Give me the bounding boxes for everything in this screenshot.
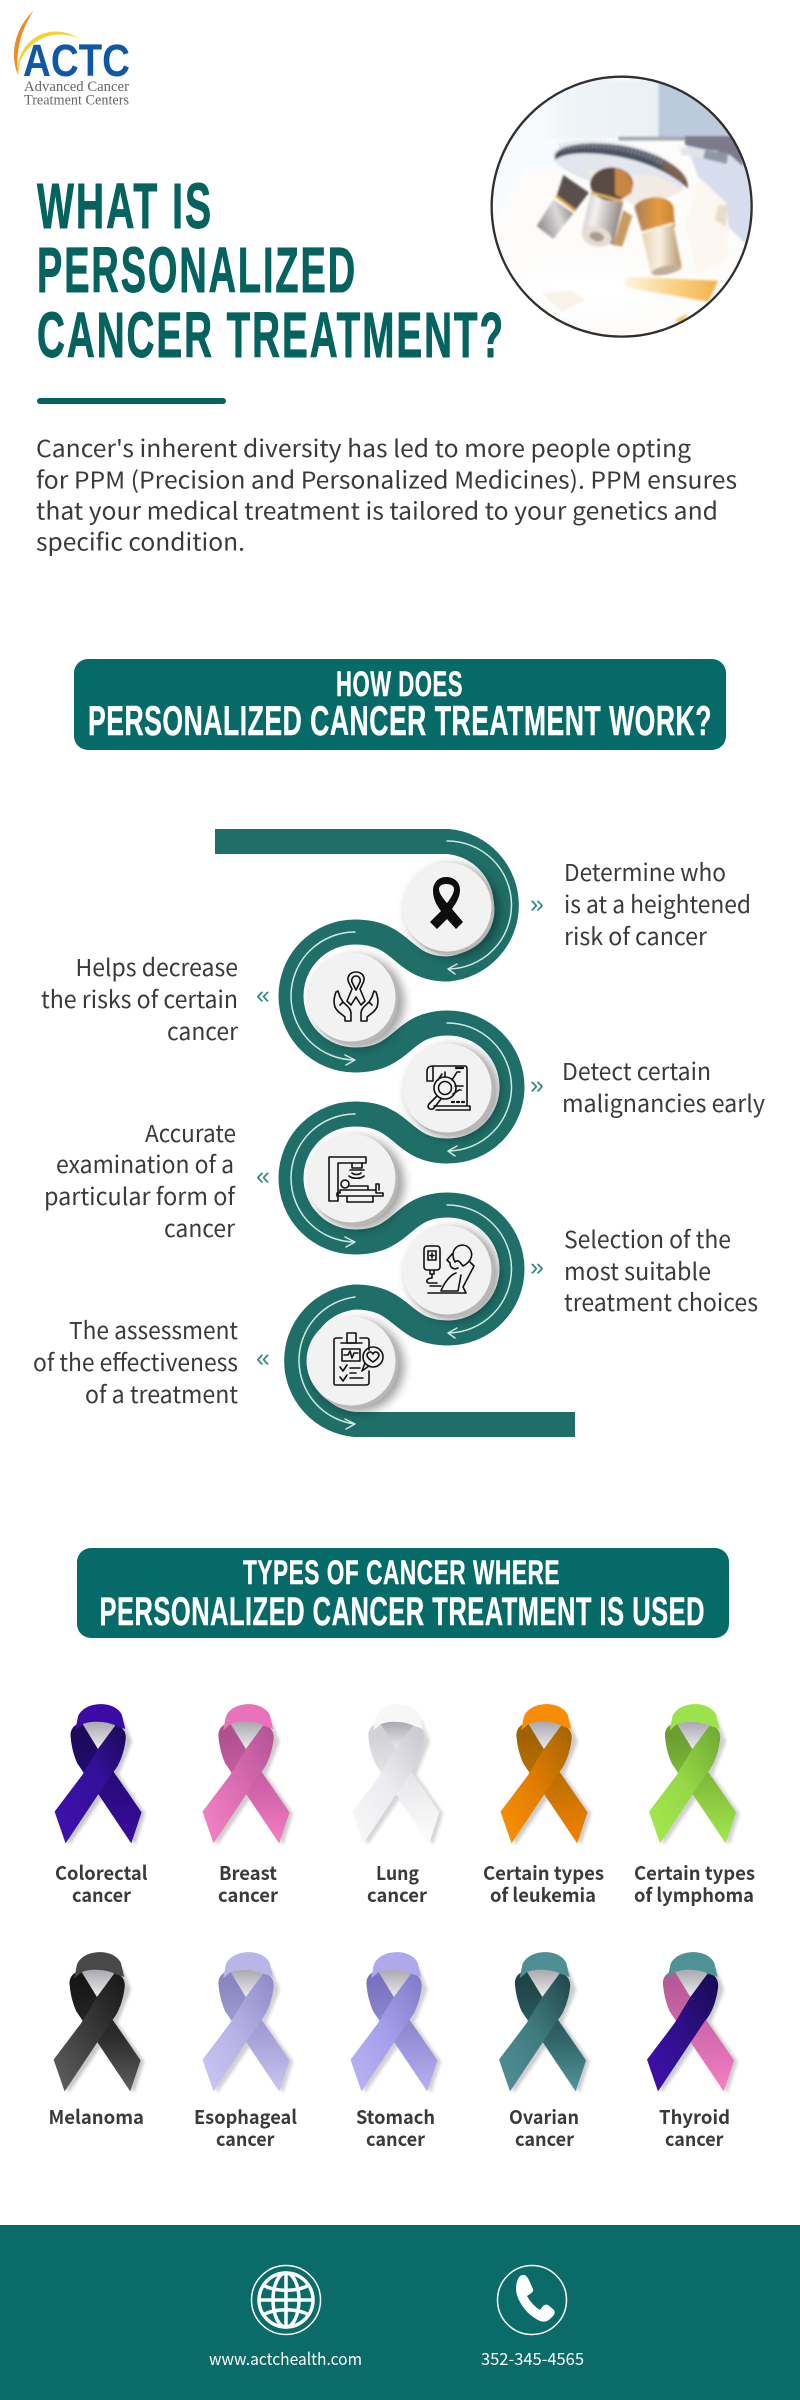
label — [367, 1859, 428, 1908]
step text: Accurate — [145, 1115, 236, 1149]
step text: of the effectiveness — [33, 1344, 238, 1378]
ribbon arrows — [291, 841, 512, 1429]
label: cancer — [366, 2125, 426, 2152]
label: cancer — [72, 1881, 132, 1908]
title: CANCER TREATMENT? — [37, 299, 505, 371]
ribbon: thyroid cancer — [647, 1952, 738, 2152]
icon: black ribbon — [430, 877, 463, 929]
intro paragraph — [36, 430, 737, 558]
footer panel — [0, 2225, 800, 2400]
intro paragraph: for PPM (Precision and Personalized Medicines). PPM ensures — [36, 462, 737, 496]
step text: most suitable — [564, 1253, 711, 1287]
label: Melanoma — [48, 2103, 144, 2130]
step 2: decrease risk — [41, 949, 404, 1048]
website: www.actchealth.com — [209, 2346, 362, 2370]
intro paragraph: specific condition. — [36, 524, 245, 558]
icon: scan report with magnifier — [427, 1066, 470, 1110]
step text — [41, 949, 239, 1047]
step 6: assessment — [33, 1312, 404, 1412]
ribbon: lymphoma — [634, 1704, 755, 1908]
step text: examination of a — [56, 1146, 234, 1180]
step text: particular form of — [44, 1178, 236, 1212]
ribbon: leukemia — [483, 1704, 604, 1908]
step 3: detect — [402, 1044, 765, 1138]
icon: phone — [498, 2266, 566, 2334]
label — [194, 2103, 297, 2152]
label — [634, 1859, 755, 1908]
logo yellow arc — [18, 32, 80, 75]
photo: microscope in circle — [485, 70, 752, 337]
photo fog — [508, 270, 662, 310]
ribbon: melanoma — [48, 1952, 144, 2130]
label — [55, 1859, 148, 1908]
step text: Detect certain — [562, 1053, 711, 1087]
label — [509, 2103, 579, 2152]
step text: cancer — [167, 1013, 239, 1047]
icon: radiation scanner — [329, 1157, 383, 1202]
step text: Selection of the — [564, 1221, 731, 1255]
label: cancer — [665, 2125, 724, 2152]
step text: the risks of certain — [41, 981, 238, 1015]
step text — [44, 1115, 236, 1244]
intro paragraph: that your medical treatment is tailored to your genetics and — [36, 492, 718, 526]
step text: treatment choices — [564, 1284, 758, 1318]
label: cancer — [367, 1881, 428, 1908]
title underline — [37, 398, 226, 404]
label — [483, 1859, 604, 1908]
chevron: « — [256, 1344, 270, 1372]
logo tagline: Treatment Centers — [24, 92, 129, 108]
label: of leukemia — [490, 1881, 596, 1908]
logo wordmark: ACTC — [23, 35, 130, 86]
chevron: » — [530, 1253, 544, 1281]
icon: hands holding ribbon — [334, 972, 378, 1021]
step text: is at a heightened — [564, 886, 751, 920]
intro paragraph: Cancer's inherent diversity has led to more people opting — [36, 430, 691, 464]
chevron: » — [530, 1071, 544, 1099]
banner: types of cancer — [77, 1548, 729, 1638]
step 5: treatment selection — [402, 1221, 758, 1320]
label: cancer — [218, 1881, 279, 1908]
step text — [564, 854, 751, 952]
label — [218, 1859, 279, 1908]
label: Certain types — [483, 1859, 604, 1886]
title: PERSONALIZED — [37, 234, 357, 306]
step text — [562, 1053, 765, 1119]
step text: risk of cancer — [564, 918, 708, 952]
step text: Determine who — [564, 854, 726, 888]
icon: globe — [252, 2266, 320, 2334]
chevron: « — [256, 1162, 270, 1190]
step text — [564, 1221, 758, 1318]
ribbon: stomach cancer — [350, 1952, 441, 2152]
label: cancer — [216, 2125, 275, 2152]
label: of lymphoma — [634, 1881, 754, 1908]
chevron: « — [256, 981, 270, 1009]
banner heading text: HOW DOES — [336, 665, 463, 704]
step text: The assessment — [69, 1312, 238, 1346]
label: Breast — [219, 1859, 277, 1886]
ribbon: lung cancer — [352, 1704, 443, 1908]
logo tagline: Advanced Cancer — [24, 79, 129, 95]
ribbon: ovarian cancer — [499, 1952, 590, 2152]
title: WHAT IS — [37, 170, 213, 242]
banner: how does it work — [74, 659, 726, 750]
ribbon: colorectal cancer — [55, 1704, 148, 1908]
step text: Helps decrease — [76, 949, 238, 983]
ribbon: breast cancer — [202, 1704, 293, 1908]
chevron: » — [530, 890, 544, 918]
step 1: risk — [402, 854, 751, 957]
step text: malignancies early — [562, 1085, 765, 1119]
label: Ovarian — [509, 2103, 579, 2130]
label: Colorectal — [55, 1859, 148, 1886]
phone number: 352-345-4565 — [481, 2346, 584, 2370]
label: cancer — [515, 2125, 575, 2152]
banner heading text — [88, 665, 712, 744]
serpentine process ribbon — [215, 841, 575, 1429]
step text: cancer — [164, 1210, 236, 1244]
step text: of a treatment — [85, 1376, 238, 1410]
label: Esophageal — [194, 2103, 297, 2130]
icon: patient receiving infusion — [424, 1245, 474, 1293]
label: Stomach — [356, 2103, 435, 2130]
logo tagline — [24, 79, 129, 108]
label — [659, 2103, 730, 2152]
title — [37, 170, 505, 371]
logo: ACTC — [14, 11, 130, 108]
step text — [33, 1312, 238, 1410]
label: Certain types — [634, 1859, 755, 1886]
step 4: examination — [44, 1115, 404, 1244]
logo orange arc — [14, 11, 34, 75]
label — [356, 2103, 435, 2152]
label: Lung — [376, 1859, 420, 1886]
banner heading text: TYPES OF CANCER WHERE — [243, 1554, 560, 1592]
banner heading text — [100, 1554, 705, 1634]
label: Thyroid — [659, 2103, 730, 2130]
icon: clipboard with heart — [334, 1333, 383, 1385]
ribbon: esophageal cancer — [194, 1952, 297, 2152]
